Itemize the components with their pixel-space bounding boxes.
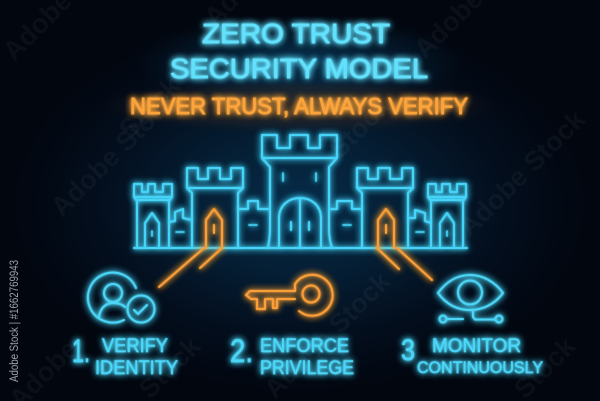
label 3: monitor continuously: CONTINUOUSLY [417,358,543,377]
right wall [408,210,431,223]
title: SECURITY MODEL [170,53,428,84]
label 2: enforce privilege: 2. [230,333,253,369]
right gate door [378,209,394,248]
label 3: monitor continuously: 3 [401,334,415,367]
label 2: enforce privilege [230,333,354,379]
label 2: enforce privilege: PRIVILEGE [260,357,354,379]
inner right wall [331,201,362,209]
tagline glow backdrop [95,78,505,134]
label 3: monitor continuously [401,334,543,377]
central gate [279,198,321,248]
label 1: verify identity: IDENTITY [95,357,178,379]
title: ZERO TRUST [202,18,390,49]
title [170,18,428,84]
title glow backdrop [135,14,465,110]
watermarks: Adobe Stock [453,104,592,242]
right small tower [428,184,466,248]
left gate tower [187,168,243,248]
left road [159,248,222,287]
icon: key [246,275,333,316]
label 3: monitor continuously: MONITOR [432,335,521,357]
label 1: verify identity: VERIFY [102,335,168,357]
right gate tower [357,168,413,248]
vertical credit: Adobe Stock | #1662769943 [9,260,21,382]
watermarks: Stock [113,70,187,144]
left wall [169,209,192,222]
label 1: verify identity: 1. [72,333,90,369]
icon: verify identity [88,273,154,323]
watermarks: Adobe Stock [45,84,184,222]
label 1: verify identity [72,333,178,379]
watermarks: Adobe Stock [258,266,397,401]
orange gates and paths [159,209,432,287]
icon: monitoring eye [438,275,503,322]
left gate door [206,209,222,248]
label 2: enforce privilege: ENFORCE [260,335,349,357]
left small tower [134,184,172,248]
small tower doors [145,213,454,248]
right road [377,248,432,280]
central keep [262,135,337,248]
watermarks: Stock [323,90,397,164]
inner left wall [238,201,268,209]
ground line [134,247,467,249]
tagline: NEVER TRUST, ALWAYS VERIFY [130,93,468,119]
castle [134,135,467,248]
